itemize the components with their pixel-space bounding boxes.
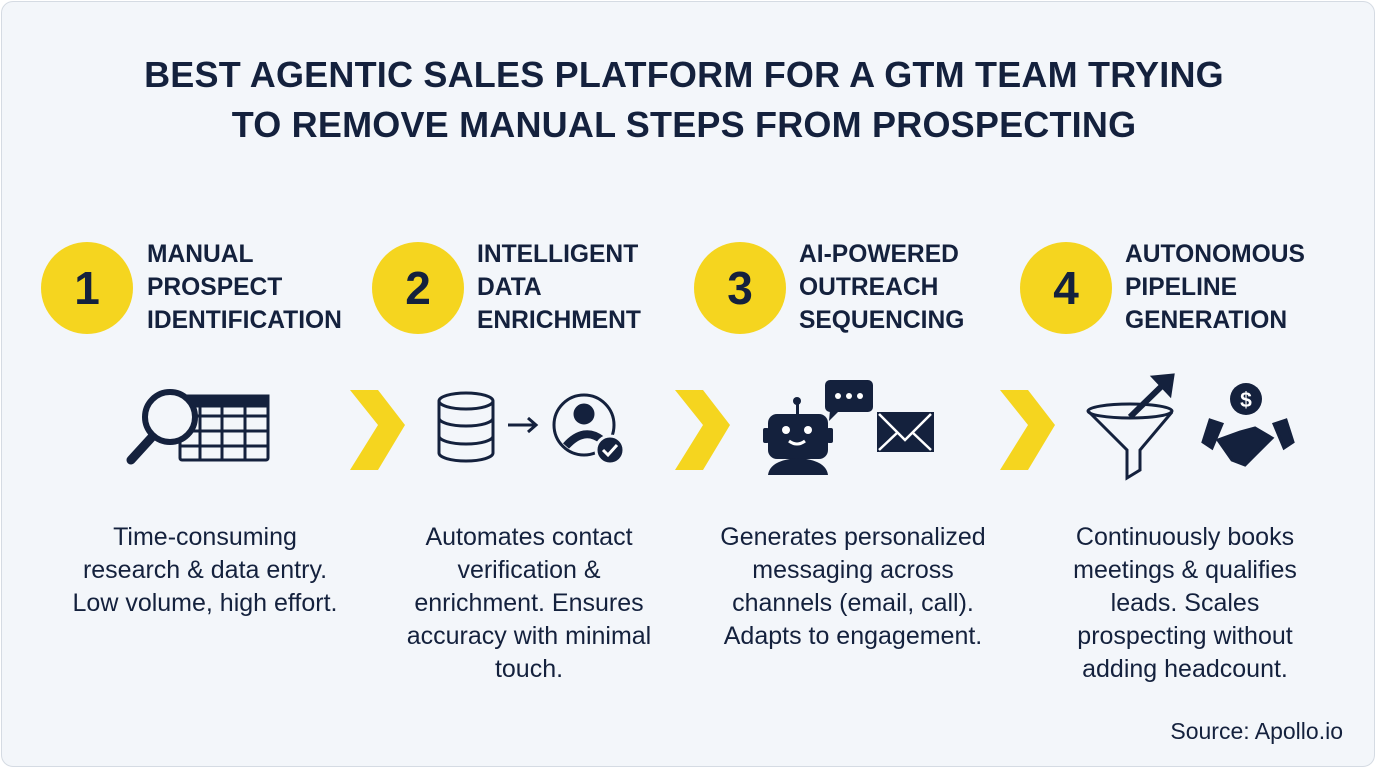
- step 4 number: 4: [1053, 262, 1079, 314]
- step 1 number: 1: [74, 262, 100, 314]
- step 4 description: meetings & qualifies: [1073, 556, 1297, 584]
- chevron 3: [1000, 390, 1055, 470]
- step 1 heading: MANUAL: [147, 241, 254, 268]
- step 4 description: Continuously books: [1076, 523, 1294, 551]
- step 4 heading: PIPELINE: [1125, 274, 1237, 301]
- step 3 description: [720, 523, 986, 650]
- step 3 description: channels (email, call).: [732, 589, 974, 617]
- step 2 heading: [477, 241, 641, 334]
- step 3 heading: AI-POWERED: [799, 241, 959, 268]
- step 3 description: messaging across: [752, 556, 954, 584]
- step 1 heading: IDENTIFICATION: [147, 307, 342, 334]
- step 4 heading: AUTONOMOUS: [1125, 241, 1305, 268]
- icon: robot, chat, envelope: [763, 380, 934, 475]
- step 2 number: 2: [405, 262, 431, 314]
- step 2 heading: ENRICHMENT: [477, 307, 641, 334]
- step 4 description: prospecting without: [1077, 622, 1293, 650]
- step 4 description: adding headcount.: [1082, 655, 1288, 683]
- title: TO REMOVE MANUAL STEPS FROM PROSPECTING: [232, 104, 1136, 145]
- icon: magnifier over table: [131, 392, 268, 460]
- step 1 description: Time-consuming: [113, 523, 297, 551]
- step 4 description: [1073, 523, 1297, 683]
- step 3 number: 3: [727, 262, 753, 314]
- step 2 number: [372, 242, 464, 334]
- step 1 heading: [147, 241, 342, 334]
- step 2 heading: INTELLIGENT: [477, 241, 638, 268]
- step 2 description: [407, 523, 651, 683]
- chevron 2: [675, 390, 730, 470]
- step 3 heading: SEQUENCING: [799, 307, 964, 334]
- title: [144, 54, 1224, 145]
- chevron 1: [350, 390, 405, 470]
- step 4 number: [1020, 242, 1112, 334]
- icon: funnel with arrow and handshake: $: [1240, 389, 1252, 412]
- step 4 heading: GENERATION: [1125, 307, 1287, 334]
- step 4 description: leads. Scales: [1111, 589, 1259, 617]
- step 3 number: [694, 242, 786, 334]
- step 3 description: Adapts to engagement.: [724, 622, 982, 650]
- step 2 description: verification &: [457, 556, 601, 584]
- step 3 heading: OUTREACH: [799, 274, 938, 301]
- step 2 description: accuracy with minimal: [407, 622, 651, 650]
- step 4 heading: [1125, 241, 1305, 334]
- step 1 description: [73, 523, 337, 617]
- source: Source: Apollo.io: [1170, 718, 1343, 744]
- title: BEST AGENTIC SALES PLATFORM FOR A GTM TEAM TRYING: [144, 54, 1224, 95]
- step 1 description: research & data entry.: [83, 556, 327, 584]
- step 2 description: Automates contact: [425, 523, 633, 551]
- step 2 description: touch.: [495, 655, 563, 683]
- icon: database to verified user: [439, 393, 624, 464]
- step 1 description: Low volume, high effort.: [73, 589, 337, 617]
- step 3 heading: [799, 241, 964, 334]
- step 1 heading: PROSPECT: [147, 274, 282, 301]
- step 1 number: [41, 242, 133, 334]
- step 2 heading: DATA: [477, 274, 542, 301]
- step 3 description: Generates personalized: [720, 523, 986, 551]
- icon: funnel with arrow and handshake: [1088, 375, 1293, 478]
- step 2 description: enrichment. Ensures: [414, 589, 644, 617]
